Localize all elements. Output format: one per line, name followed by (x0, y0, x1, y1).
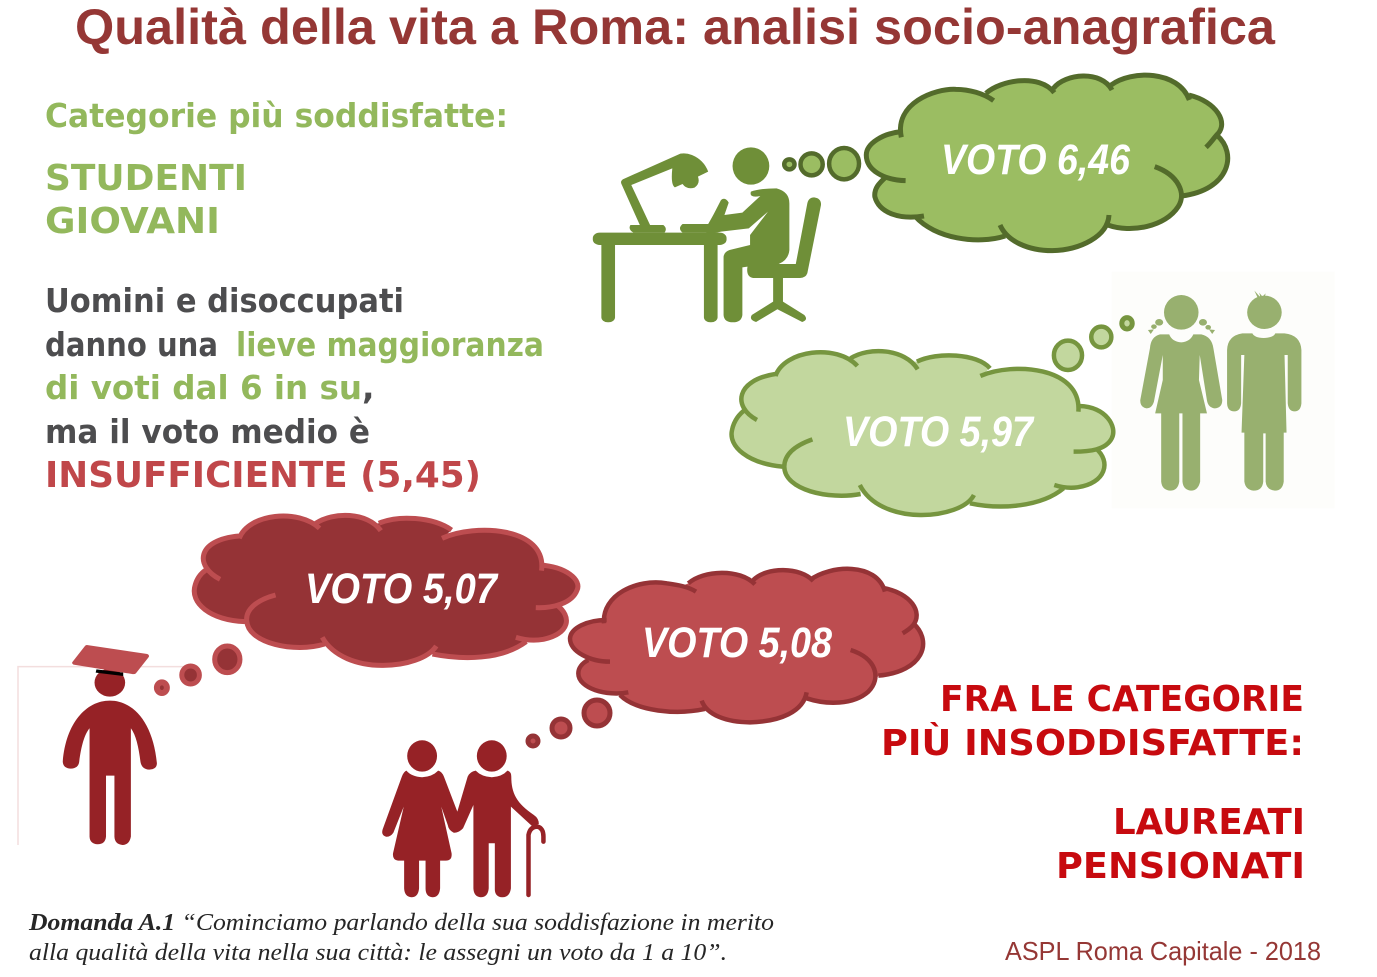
cloud: VOTO 6,46: VOTO 6,46 (941, 136, 1131, 184)
thought bubbles: retirees (528, 700, 610, 746)
title: Qualità della vita a Roma: analisi socio-anagrafica (75, 0, 1276, 55)
thought bubbles: graduate (157, 646, 240, 693)
text block: average score explanation: danno una (45, 325, 218, 364)
text block: least satisfied categories: LAUREATI (1113, 802, 1305, 843)
text block: average score explanation: , (362, 368, 375, 407)
icon: elderly couple (382, 740, 543, 897)
text block: most satisfied categories: Categorie più soddisfatte: (45, 96, 508, 135)
text block: average score explanation: ma il voto medio è (45, 412, 370, 451)
icon: student at desk (593, 147, 821, 322)
cloud: VOTO 6,46 (866, 75, 1228, 251)
text block: most satisfied categories: STUDENTI (45, 158, 247, 199)
text block: most satisfied categories (45, 96, 508, 242)
text block: least satisfied categories (881, 679, 1305, 887)
text block: least satisfied categories: FRA LE CATEGORIE (940, 679, 1304, 720)
cloud: VOTO 5,07 (194, 515, 578, 665)
text block: most satisfied categories: GIOVANI (45, 201, 220, 242)
cloud: VOTO 5,97 (732, 351, 1113, 515)
cloud: VOTO 5,08: VOTO 5,08 (642, 619, 832, 667)
footnote: survey question (28, 910, 774, 966)
text block: average score explanation: di voti dal 6 in su (45, 368, 362, 407)
thought bubbles: young people (1054, 318, 1132, 370)
cloud: VOTO 5,08 (570, 569, 923, 722)
cloud: VOTO 5,07: VOTO 5,07 (305, 565, 499, 613)
text block: average score explanation (45, 281, 544, 496)
text block: least satisfied categories: PIÙ INSODDISFATTE: (881, 722, 1304, 764)
text block: average score explanation: INSUFFICIENTE (5,45) (45, 455, 481, 496)
thought bubbles: student (784, 148, 859, 179)
source credit: ASPL Roma Capitale - 2018 (1005, 936, 1321, 966)
footnote: survey question: alla qualità della vita nella sua città: le assegni un voto da 1 a 10”. (29, 940, 727, 966)
text block: average score explanation: lieve maggioranza (236, 325, 544, 364)
text block: least satisfied categories: PENSIONATI (1056, 846, 1305, 887)
footnote: survey question: Domanda A.1 “Cominciamo parlando della sua soddisfazione in merito (28, 910, 774, 936)
text block: average score explanation: Uomini e disoccupati (45, 281, 404, 320)
cloud: VOTO 5,97: VOTO 5,97 (843, 408, 1035, 456)
icon: young people (1112, 272, 1335, 508)
icon: graduate (18, 645, 184, 845)
